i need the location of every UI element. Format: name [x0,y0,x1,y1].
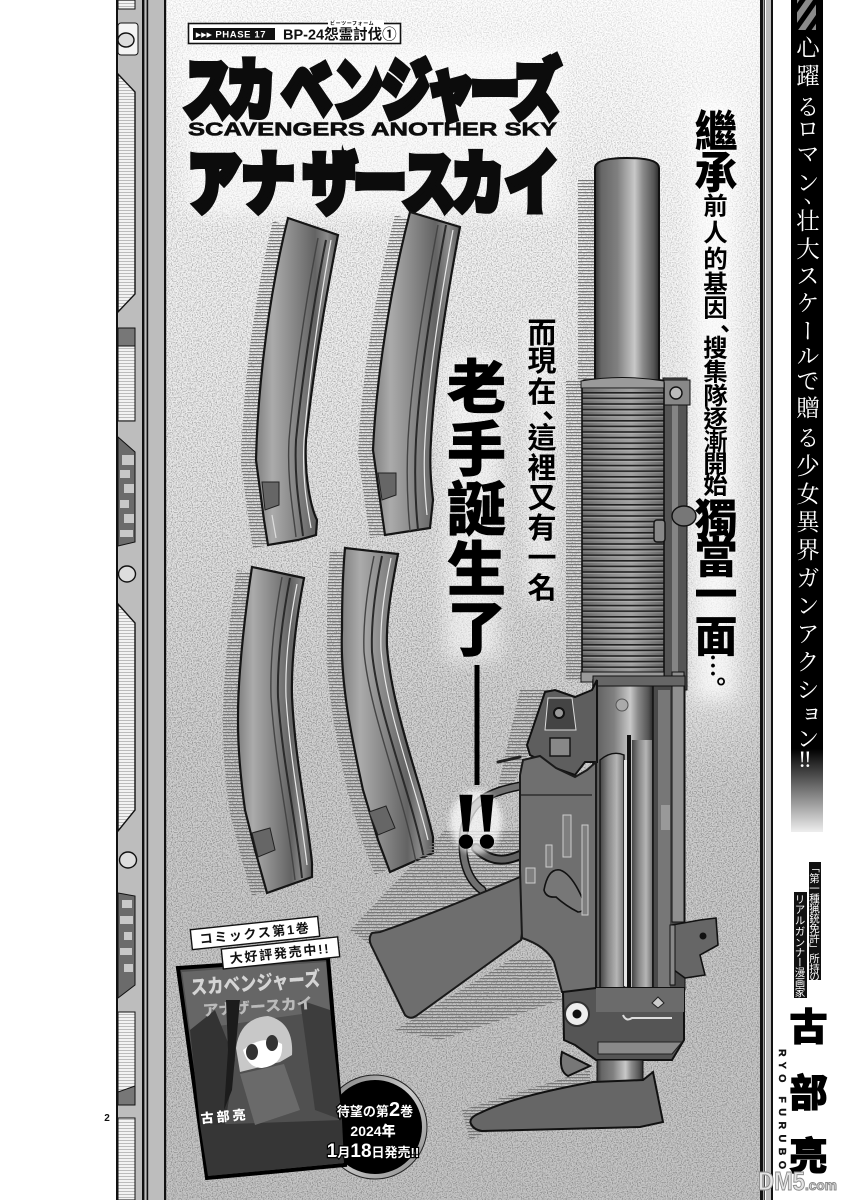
right caption column: 前人的基因、搜集隊逐漸開始 [700,192,736,496]
right black tagline bar [791,0,823,832]
ammo magazine top left [241,218,338,548]
watermark: DM5 [758,1166,805,1196]
cover rifle [224,1000,240,1110]
promo: on sale label [221,937,340,969]
cover title: スカベンジャーズ [190,967,321,1000]
title line one: スカベンジャーズ [183,53,561,129]
pistol grip [370,877,530,1018]
page number: 2 [104,1113,110,1124]
watermark [758,1166,837,1196]
rail under handguard [663,378,690,690]
watermark: .com [805,1177,837,1193]
promo: comic cover [178,958,345,1178]
butt plate [470,1072,663,1131]
long dash [474,665,480,785]
submachine gun with suppressor [350,158,718,1140]
selector lever [544,870,584,912]
author credentials [794,862,821,998]
author name: 古部亮 [783,1007,827,1174]
promo: release date text: 1月18日発売!! [327,1141,419,1162]
cover subtitle: アナザースカイ [202,995,313,1020]
tagline: 心躍るロマン、壮大スケールで贈る少女異界ガンアクション‼ [792,35,820,773]
trigger guard [463,757,520,890]
ammo magazine top right [358,212,460,538]
secondary caption column: 而現在、這裡又有一名 [523,318,561,602]
lower receiver [520,756,596,992]
episode number: ▸▸▸ PHASE 17 [195,30,266,40]
promo: on sale label: 大好評発売中!! [229,941,331,966]
promo: release badge [323,1075,427,1179]
promo: release date text: 待望の第2巻 [337,1099,413,1121]
cover armour [240,1064,300,1125]
furigana: ビーツーフォーム [330,20,374,27]
stock housing [563,988,684,1060]
right frame rail [760,0,773,1200]
left mechanical frame rail [116,0,166,1200]
gun shadow hatching [350,180,600,1140]
exclamation marks: !! [453,777,500,864]
title logo [183,53,561,224]
sling loop [561,1052,590,1076]
suppressor tube [595,158,659,382]
receiver barrel section [593,676,685,990]
ammo magazine bottom left [223,567,312,896]
episode name: BP-24怨霊討伐① [283,26,397,44]
promo: volume one label: コミックス第1巻 [199,920,311,947]
title line two: アナザースカイ [187,147,559,224]
cocking handle knob [672,506,696,526]
ribbed handguard [581,378,665,682]
cover girl eyes [246,1035,278,1060]
rear sling mount [670,918,718,985]
cover author name: 古部亮 [200,1107,249,1126]
promo: release date text: 2024年 [350,1123,396,1139]
promo: release date text [327,1099,419,1162]
selector markings [526,815,588,915]
author romaji: RYO FURUBO [776,1049,788,1169]
credential line two: リアルガンナー漫画家 [794,894,806,997]
english subtitle: SCAVENGERS ANOTHER SKY [188,118,558,140]
main caption column: 老手誕生了 [438,356,506,658]
cover girl hair [236,1016,292,1072]
right caption column: 繼承 [688,108,738,194]
right caption column: …。 [696,653,738,693]
rear sight block [526,680,597,775]
receiver rail [653,672,685,990]
stock tube [597,1060,643,1086]
ammo magazine bottom right [327,548,433,875]
credential line one: 「第一種猟銃免許」所持の [808,862,820,981]
cover girl face [243,1040,282,1068]
promo: volume one label [190,916,320,950]
right caption column: 獨當一面 [688,496,738,656]
episode label [188,20,400,44]
